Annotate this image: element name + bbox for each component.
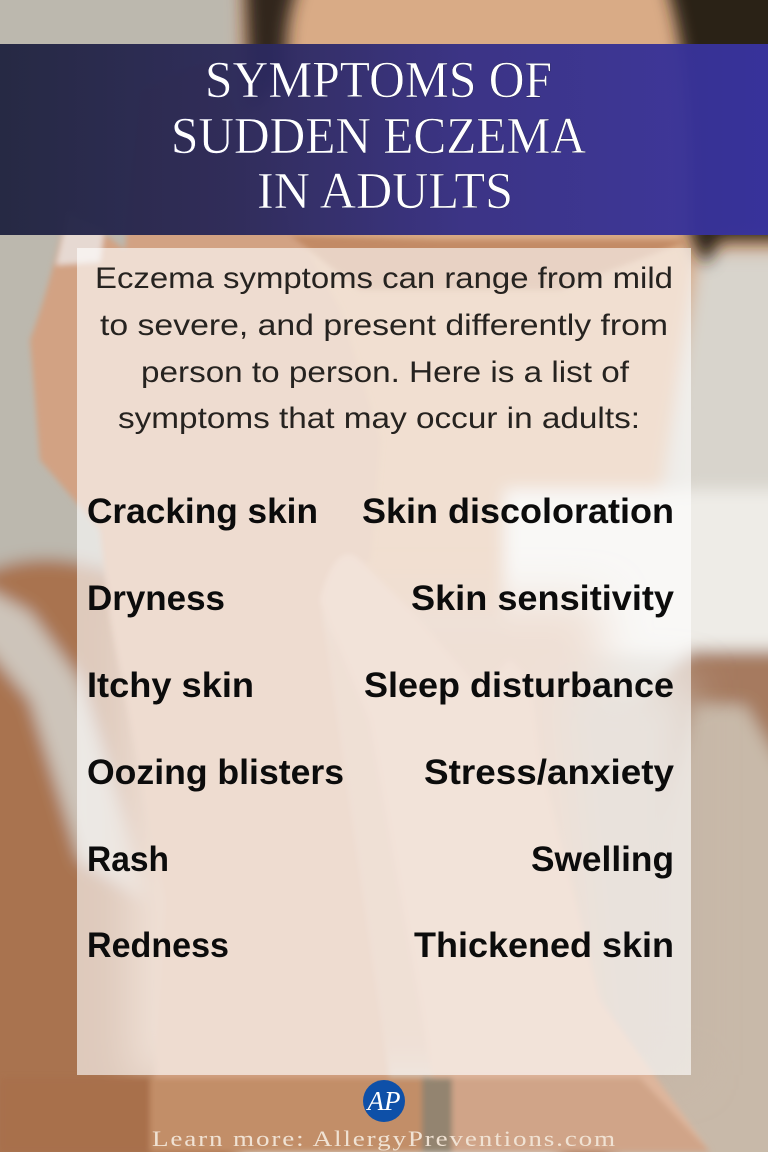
symptom list: left column: Dryness — [87, 579, 225, 618]
logo: AP — [363, 1080, 405, 1122]
title — [171, 52, 586, 220]
panel: symptoms — [77, 248, 691, 1075]
title: SUDDEN ECZEMA — [171, 108, 586, 165]
intro text — [95, 262, 673, 435]
symptom list: right column: Sleep disturbance — [364, 666, 674, 705]
title: IN ADULTS — [257, 163, 513, 220]
symptom list: left column: Cracking skin — [87, 492, 318, 531]
symptom list: right column: Skin discoloration — [362, 492, 674, 531]
banner — [0, 44, 768, 235]
symptom list: left column: Rash — [87, 840, 169, 879]
intro text: symptoms that may occur in adults: — [118, 402, 640, 435]
symptom list: right column: Stress/anxiety — [424, 753, 675, 792]
intro text: person to person. Here is a list of — [141, 356, 630, 389]
title: SYMPTOMS OF — [205, 52, 552, 109]
symptom list: right column: Swelling — [531, 840, 674, 879]
footer: website link: Learn more: AllergyPreventions.com — [152, 1126, 617, 1151]
symptom list: left column: Oozing blisters — [87, 753, 344, 792]
intro text: to severe, and present differently from — [100, 309, 668, 342]
symptom list: right column: Skin sensitivity — [411, 579, 675, 618]
symptom list: right column — [362, 492, 675, 965]
intro text: Eczema symptoms can range from mild — [95, 262, 673, 295]
symptom list: right column: Thickened skin — [414, 926, 674, 965]
symptom list: left column: Redness — [87, 926, 229, 965]
symptom list: left column — [87, 492, 344, 965]
symptom list: left column: Itchy skin — [87, 666, 254, 705]
logo: AP: AP — [366, 1086, 400, 1116]
